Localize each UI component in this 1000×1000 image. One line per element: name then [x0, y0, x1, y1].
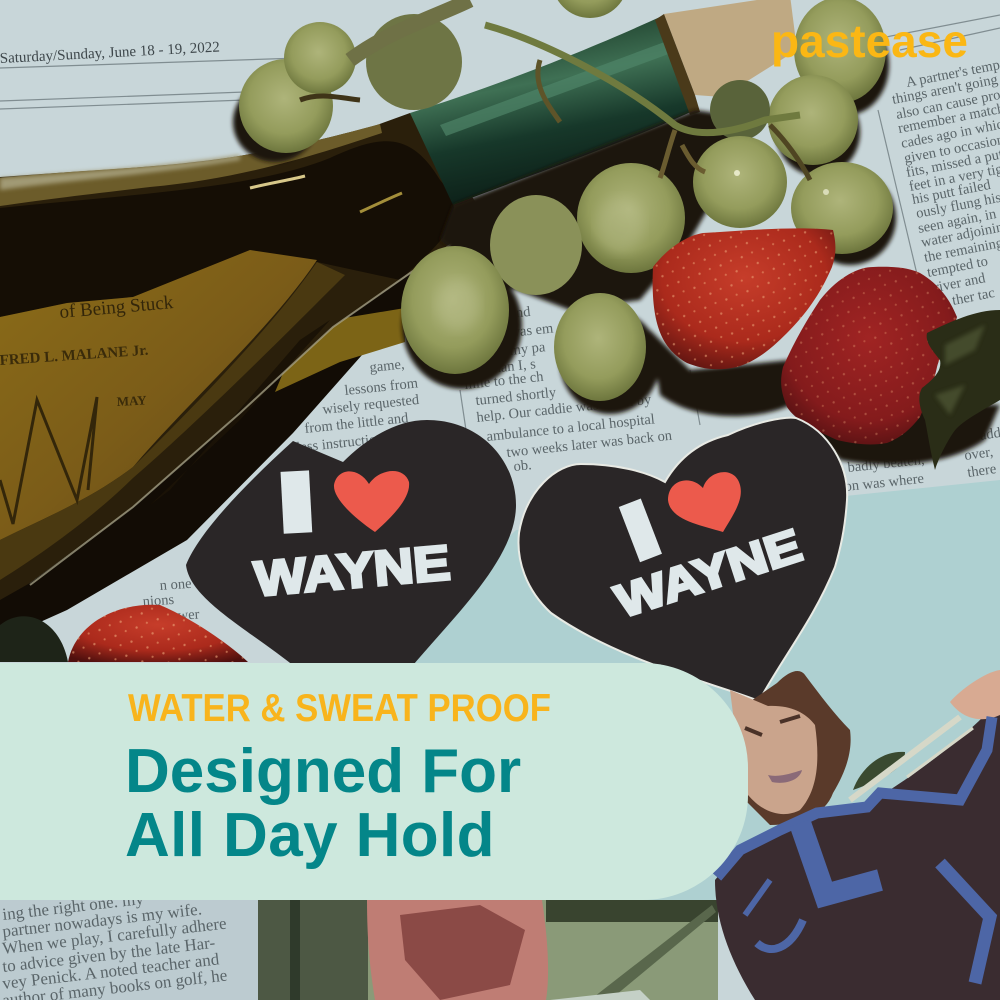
newspaper background: over,: [963, 444, 994, 464]
grape stems: [300, 0, 810, 180]
newspaper background: game,: [369, 356, 405, 376]
heart pastie right: I: [602, 477, 679, 583]
strawberry leaves: [919, 310, 1000, 470]
heart pastie left: WAYNE: [252, 536, 452, 607]
heart pastie left: I: [266, 450, 326, 554]
heart pastie right: [518, 418, 847, 701]
dark shadows under the fruit: [233, 15, 1000, 465]
lower-left newspaper column: [0, 889, 258, 1000]
newspaper background: his putt failed: [911, 177, 993, 208]
eyebrow heading: WATER & SWEAT PROOF: [128, 686, 551, 730]
wine bottle: FRED L. MALANE Jr.: [0, 343, 149, 369]
text panel: [0, 663, 748, 900]
wine bottle: [0, 113, 500, 640]
newspaper background: Saturday/Sunday, June 18 - 19, 2022: [0, 39, 220, 67]
strawberry lower-left: [0, 605, 248, 662]
grapes: [239, 0, 893, 401]
newspaper background: seen again, in: [917, 206, 998, 237]
lower photo: golfer figure: [715, 670, 1000, 1000]
newspaper background: n one: [159, 576, 192, 594]
newspaper background: there: [966, 461, 997, 481]
newspaper background: help. Our caddie was taken by: [476, 392, 653, 426]
newspaper background: wife: [306, 349, 333, 368]
heart pastie left: [186, 420, 516, 670]
wine bottle: MAY: [116, 392, 148, 409]
newspaper background: tempted to: [926, 253, 989, 281]
lower-left newspaper column: vey Penick. A noted teacher and: [1, 949, 221, 993]
newspaper background: and: [509, 304, 532, 322]
newspaper background: badly beaten,: [847, 452, 925, 476]
lower-left newspaper column: partner nowadays is my wife.: [1, 899, 203, 941]
newspaper background: than I, s: [489, 356, 537, 377]
newspaper background: ther tac: [951, 285, 996, 309]
newspaper background: lessons from: [344, 375, 419, 399]
newspaper background: things aren't going: [891, 72, 999, 108]
strawberry centre: [653, 228, 835, 369]
newspaper background: less instruction: [296, 431, 385, 456]
newspaper background: my pa: [509, 339, 547, 359]
wine bottle: of Being Stuck: [59, 292, 174, 323]
newspaper background: was em: [509, 320, 555, 341]
newspaper background: wer: [177, 607, 200, 624]
newspaper background: wisely requested: [322, 392, 421, 418]
newspaper background: A partner's temp: [905, 57, 1000, 91]
newspaper background: river and: [933, 270, 987, 296]
newspaper background: also can cause pro: [895, 87, 1000, 123]
newspaper background: on was where: [844, 471, 925, 495]
brand logo: pastease: [771, 15, 968, 67]
main heading: Designed For: [125, 736, 521, 806]
lower photo: landscape with checked shirt: [258, 900, 718, 1000]
lower-left newspaper column: to advice given by the late Har-: [1, 933, 216, 976]
strawberry right: [781, 267, 957, 444]
lower-left newspaper column: ing the right one. my: [1, 889, 145, 924]
newspaper background: from the little and: [304, 410, 410, 437]
newspaper background: ob.: [513, 457, 532, 475]
newspaper background: king: [963, 407, 991, 426]
newspaper background: turned shortly: [475, 385, 558, 409]
main heading: [125, 736, 521, 870]
newspaper background: ambulance to a local hospital: [486, 411, 656, 445]
lower-left newspaper column: When we play, I carefully adhere: [1, 914, 227, 958]
newspaper background: ously flung his: [915, 190, 1000, 222]
heart pastie right: WAYNE: [609, 519, 808, 628]
newspaper background: two weeks later was back on: [506, 428, 674, 461]
newspaper background: mile to the ch: [464, 369, 545, 393]
newspaper background: nions: [142, 592, 175, 610]
main heading: All Day Hold: [125, 800, 495, 870]
bottle neck foil and cork: [410, 0, 797, 205]
